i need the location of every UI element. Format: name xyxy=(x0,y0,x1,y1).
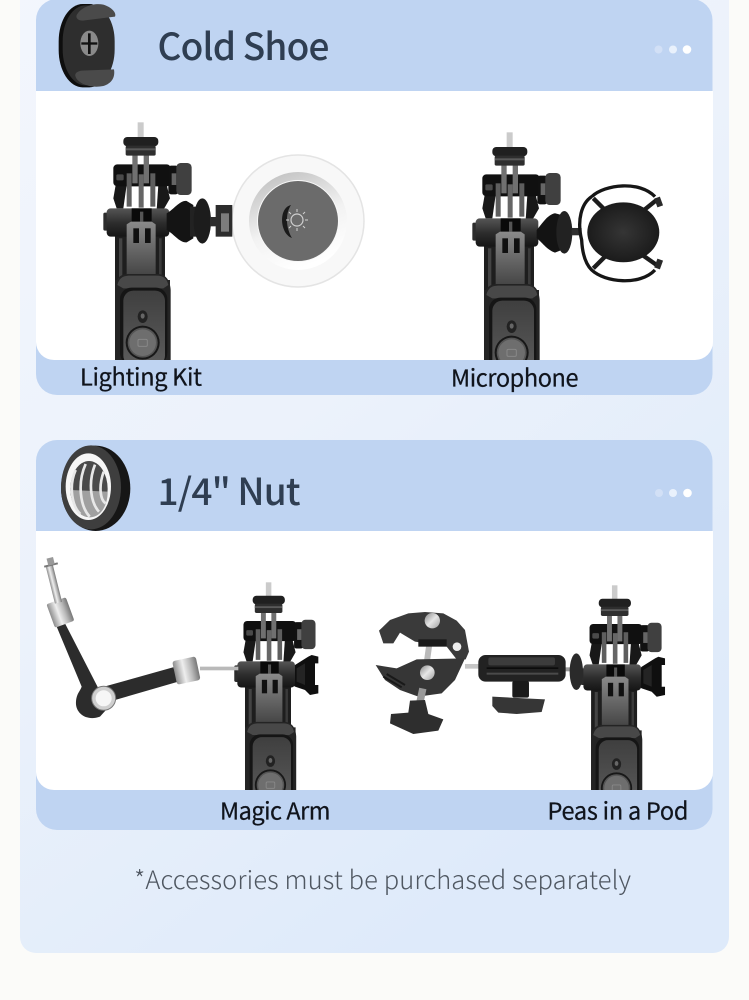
footnote: *Accessories must be purchased separately xyxy=(134,860,632,897)
icon: threaded nut xyxy=(61,445,130,531)
panel background: Cold Shoe xyxy=(36,0,712,395)
super clamp and ball arm xyxy=(376,612,583,734)
product: grip with lighting kit xyxy=(103,122,364,366)
product: grip with microphone xyxy=(472,132,663,376)
magic arm xyxy=(44,557,238,718)
lighting kit xyxy=(167,155,364,287)
panel: Cold Shoe xyxy=(36,0,713,395)
microphone xyxy=(537,186,663,281)
label: Microphone: Microphone xyxy=(451,360,578,394)
icon: cold shoe mount xyxy=(59,4,115,87)
product: peas in a pod clamp with grip xyxy=(376,585,665,809)
white product area: Nut xyxy=(36,531,713,790)
panel: 1/4 inch Nut xyxy=(36,440,713,830)
heading: 1/4" Nut: 1/4" Nut xyxy=(158,462,301,516)
label: Lighting Kit: Lighting Kit xyxy=(80,358,202,392)
panel background: Nut xyxy=(36,440,712,830)
white product area: Cold Shoe xyxy=(36,91,713,360)
cold shoe adapter xyxy=(294,655,318,695)
cold shoe adapter xyxy=(640,656,666,697)
product: magic arm with grip xyxy=(44,557,318,806)
heading: Cold Shoe: Cold Shoe xyxy=(158,17,330,71)
pagination dots xyxy=(655,489,692,497)
label: Magic Arm: Magic Arm xyxy=(220,792,330,826)
label: Peas in a Pod: Peas in a Pod xyxy=(548,792,688,826)
pagination dots xyxy=(654,45,691,54)
